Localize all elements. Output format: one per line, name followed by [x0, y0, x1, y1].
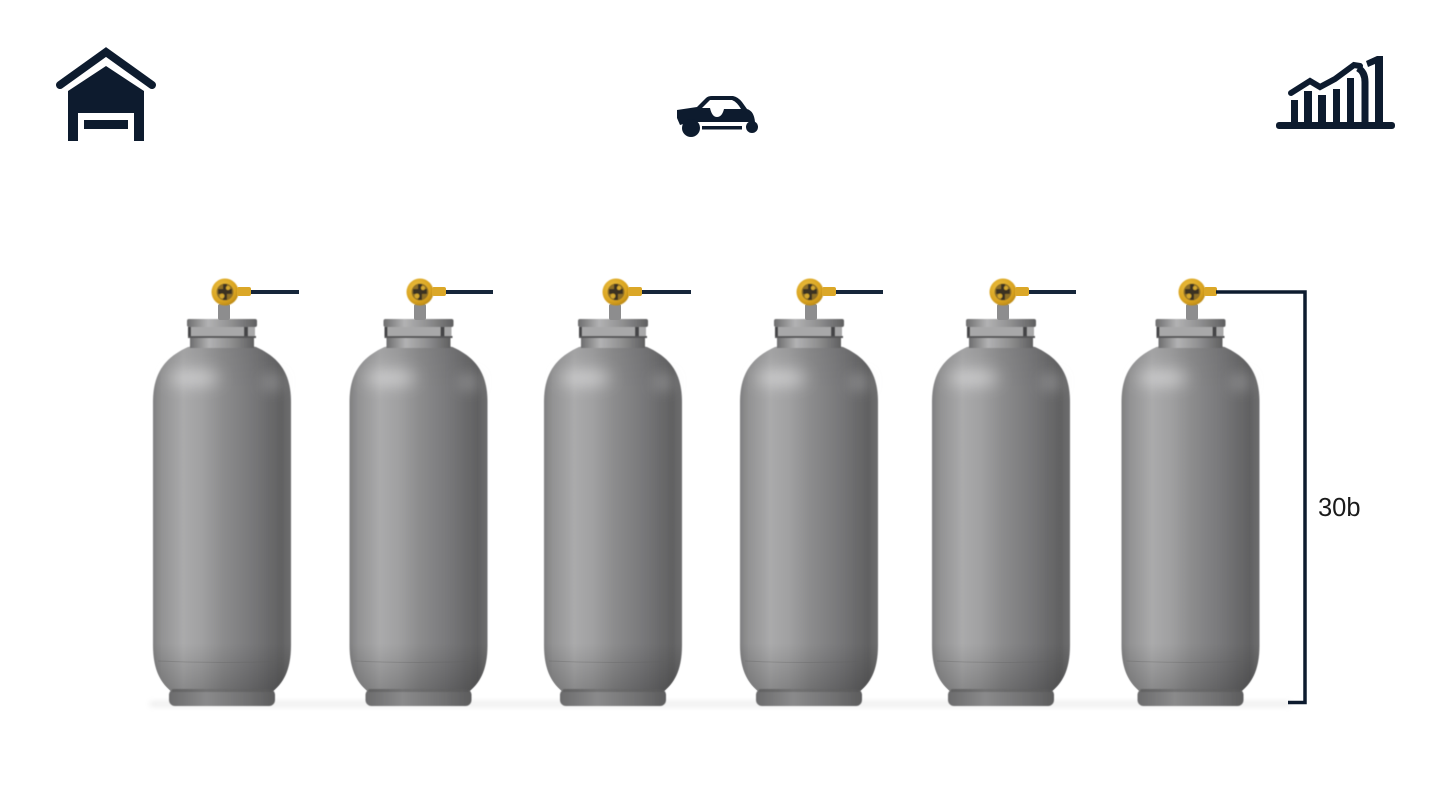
icon: rising bar chart: [1276, 56, 1395, 129]
cylinder 2: [350, 278, 493, 706]
dimension label: 30b: [1318, 494, 1361, 522]
height dimension bracket: [1216, 292, 1305, 702]
cylinder 4: [740, 278, 883, 706]
cylinder 5: [932, 278, 1076, 706]
cylinder 1: [153, 278, 299, 706]
floor shadow: [150, 702, 1290, 706]
cylinder 6: [1122, 278, 1260, 706]
icon: car: [677, 96, 758, 137]
cylinder 3: [544, 278, 691, 706]
icon: garage house: [60, 52, 152, 141]
